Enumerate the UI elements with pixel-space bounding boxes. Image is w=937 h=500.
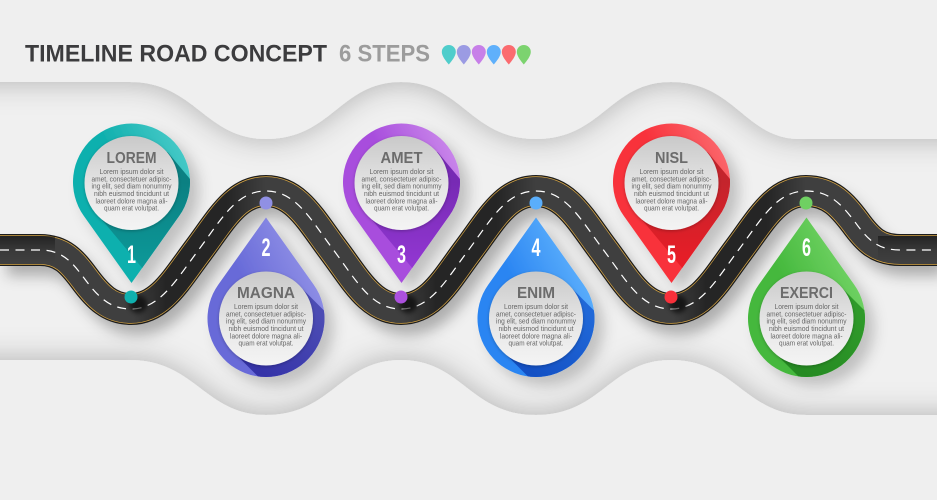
pin 1: LOREM bbox=[73, 124, 204, 292]
road marker 3 bbox=[394, 290, 417, 313]
road marker 4 bbox=[530, 196, 542, 210]
pin 5: NISL: 5 bbox=[667, 241, 676, 269]
pin 4: ENIM: ENIM bbox=[517, 285, 555, 302]
pin 1: LOREM: amet, consectetuer adipisc- bbox=[92, 176, 172, 183]
pin 5: NISL: ing elit, sed diam nonummy bbox=[632, 184, 712, 191]
pin 4: ENIM: nibh euismod tincidunt ut bbox=[498, 326, 574, 333]
pin 2: MAGNA: quam erat volutpat. bbox=[238, 341, 294, 348]
road marker 5 bbox=[664, 290, 687, 313]
pin 2: MAGNA: amet, consectetuer adipisc- bbox=[226, 311, 307, 318]
pin 5: NISL: quam erat volutpat. bbox=[644, 206, 699, 213]
pin 6: EXERCI: EXERCI bbox=[780, 285, 833, 302]
icon row: small colored pins bbox=[442, 45, 531, 64]
pin 1: LOREM: nibh euismod tincidunt ut bbox=[94, 191, 169, 198]
pin 4: ENIM: 4 bbox=[532, 234, 541, 262]
pin 2: MAGNA: 2 bbox=[262, 234, 270, 262]
pin 6: EXERCI: ing elit, sed diam nonummy bbox=[766, 319, 847, 326]
pin 3: AMET: nibh euismod tincidunt ut bbox=[364, 191, 439, 198]
pin 3: AMET: 3 bbox=[397, 241, 406, 269]
pin 1: LOREM: LOREM bbox=[106, 150, 156, 167]
road marker 6 bbox=[800, 196, 812, 210]
pin 3: AMET: Lorem ipsum dolor sit bbox=[370, 169, 434, 176]
pin 4: ENIM: laoreet dolore magna ali- bbox=[500, 333, 573, 340]
pin 2: MAGNA: Lorem ipsum dolor sit bbox=[234, 304, 298, 311]
pin 3: AMET: ing elit, sed diam nonummy bbox=[362, 184, 442, 191]
pin 6: EXERCI: 6 bbox=[802, 234, 811, 262]
pin 5: NISL bbox=[613, 124, 744, 292]
pin 3: AMET: amet, consectetuer adipisc- bbox=[362, 176, 442, 183]
pin 1: LOREM: ing elit, sed diam nonummy bbox=[92, 184, 172, 191]
pin 4: ENIM: ing elit, sed diam nonummy bbox=[496, 319, 576, 326]
pin 6: EXERCI: Lorem ipsum dolor sit bbox=[774, 304, 839, 311]
title: TIMELINE ROAD CONCEPT bbox=[25, 40, 327, 68]
pin 6: EXERCI: amet, consectetuer adipisc- bbox=[766, 311, 847, 318]
pin 2: MAGNA: laoreet dolore magna ali- bbox=[230, 333, 303, 340]
pin 1: LOREM: 1 bbox=[127, 241, 136, 269]
pin 4: ENIM: quam erat volutpat. bbox=[508, 341, 564, 348]
pin 4: ENIM: amet, consectetuer adipisc- bbox=[496, 311, 577, 318]
pin 5: NISL: nibh euismod tincidunt ut bbox=[634, 191, 709, 198]
pin 3: AMET bbox=[343, 124, 474, 292]
road marker 1 bbox=[124, 290, 147, 313]
pin 2: MAGNA: MAGNA bbox=[237, 285, 295, 302]
pin 4: ENIM bbox=[478, 218, 609, 392]
pin 1: LOREM: quam erat volutpat. bbox=[104, 206, 159, 213]
pin 1: LOREM: Lorem ipsum dolor sit bbox=[100, 169, 164, 176]
pin 3: AMET: AMET bbox=[380, 150, 423, 167]
pin 2: MAGNA: nibh euismod tincidunt ut bbox=[228, 326, 304, 333]
pin 6: EXERCI: nibh euismod tincidunt ut bbox=[769, 326, 844, 333]
pin 5: NISL: laoreet dolore magna ali- bbox=[636, 198, 708, 205]
road marker 2 bbox=[260, 196, 272, 210]
pin 1: LOREM: laoreet dolore magna ali- bbox=[96, 198, 168, 205]
pin 5: NISL: amet, consectetuer adipisc- bbox=[632, 176, 712, 183]
pin 4: ENIM: Lorem ipsum dolor sit bbox=[504, 304, 568, 311]
pin 6: EXERCI bbox=[748, 218, 880, 392]
subtitle: 6 steps: 6 STEPS bbox=[339, 40, 430, 68]
pin 2: MAGNA: ing elit, sed diam nonummy bbox=[226, 319, 306, 326]
pin 3: AMET: quam erat volutpat. bbox=[374, 206, 429, 213]
pin 2: MAGNA bbox=[208, 218, 339, 392]
pin 3: AMET: laoreet dolore magna ali- bbox=[366, 198, 438, 205]
pin 5: NISL: Lorem ipsum dolor sit bbox=[640, 169, 704, 176]
winding road bbox=[0, 191, 937, 320]
pin 5: NISL: NISL bbox=[655, 150, 688, 167]
pin 6: EXERCI: laoreet dolore magna ali- bbox=[770, 333, 843, 340]
pin 6: EXERCI: quam erat volutpat. bbox=[779, 341, 834, 348]
